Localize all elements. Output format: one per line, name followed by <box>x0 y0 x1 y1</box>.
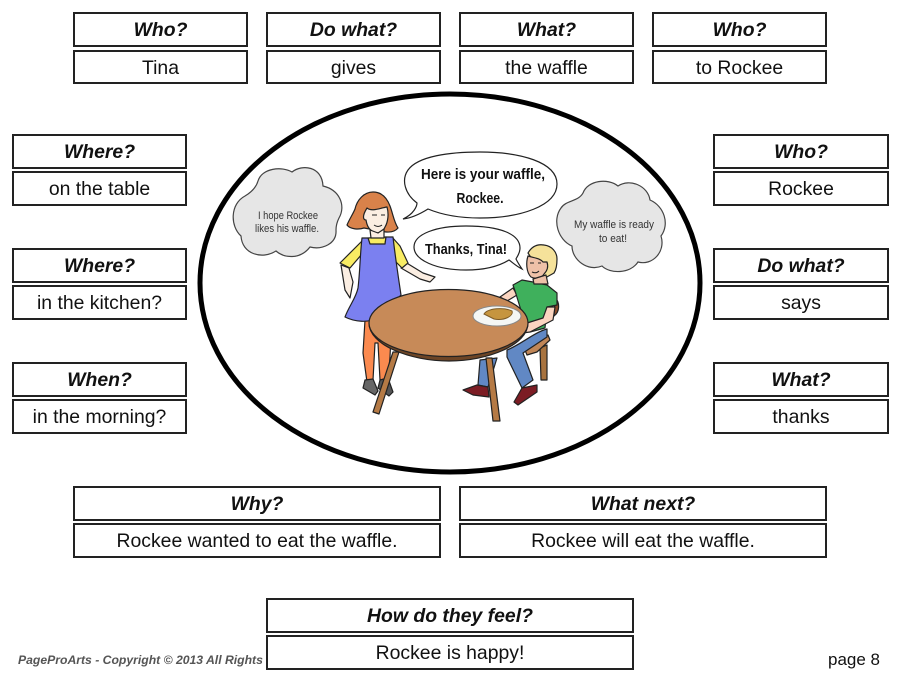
heading: Why?: Why? <box>231 493 283 515</box>
left: When in the morning <box>12 362 187 434</box>
answer: Tina: Tina <box>142 56 179 78</box>
answer: Rockee <box>713 171 889 206</box>
heading: Where? <box>12 134 187 169</box>
row: Who Tina <box>73 12 248 84</box>
answer: in the kitchen? <box>12 285 187 320</box>
heading: Do what?: Do what? <box>757 255 845 277</box>
heading: What? <box>459 12 634 47</box>
heading: What next? <box>459 486 827 521</box>
thought cloud: Rockee: to eat! <box>599 233 627 245</box>
answer: in the kitchen?: in the kitchen? <box>37 292 162 314</box>
heading: Who?: Who? <box>774 141 828 163</box>
bottom: How do they feel <box>266 598 634 670</box>
answer: feeling <box>266 635 634 670</box>
answer: why: Rockee wanted to eat the waffle. <box>116 530 397 552</box>
answer: gives <box>266 50 441 84</box>
oval frame <box>200 94 700 472</box>
left: Where in the kitchen <box>12 248 187 320</box>
heading: Who? <box>73 12 248 47</box>
copyright footer: PageProArts - Copyright © 2013 All Rights <box>18 653 263 667</box>
heading: How do they feel?: How do they feel? <box>367 605 533 627</box>
heading: When?: When? <box>67 369 132 391</box>
answer: why <box>73 523 441 558</box>
row: What the waffle <box>459 12 634 84</box>
plate with waffle <box>473 306 521 326</box>
answer: what next <box>459 523 827 558</box>
table <box>369 290 528 421</box>
speech bubble: Tina: Rockee. <box>456 191 504 207</box>
answer: says <box>713 285 889 320</box>
heading: Who? <box>652 12 827 47</box>
right: Do what says <box>713 248 889 320</box>
heading: Do what?: Do what? <box>310 19 397 41</box>
left: Where on the table <box>12 134 187 206</box>
thought cloud: Rockee: My waffle is ready <box>574 219 654 231</box>
row: Do what gives <box>266 12 441 84</box>
answer: gives: gives <box>331 56 376 78</box>
thought cloud: Tina: likes his waffle. <box>255 223 319 235</box>
answer: on the table: on the table <box>49 178 150 200</box>
heading: Who?: Who? <box>134 19 187 41</box>
answer: says: says <box>781 292 821 314</box>
row: Who to Rockee <box>652 12 827 84</box>
thought cloud: Rockee <box>557 181 665 272</box>
heading: Why? <box>73 486 441 521</box>
heading: Do what? <box>713 248 889 283</box>
heading: Who? <box>713 134 889 169</box>
answer: the waffle: the waffle <box>505 56 588 78</box>
speech bubble: Tina: Here is your waffle, <box>421 167 545 183</box>
speech bubble: Rockee <box>414 226 522 270</box>
heading: What next?: What next? <box>591 493 695 515</box>
thought cloud: Tina <box>233 168 342 257</box>
answer: to Rockee <box>652 50 827 84</box>
answer: thanks <box>713 399 889 434</box>
speech bubble: Tina <box>403 152 557 219</box>
boy Rockee <box>463 245 559 405</box>
heading: Where? <box>12 248 187 283</box>
heading: Who?: Who? <box>713 19 766 41</box>
answer: thanks: thanks <box>772 406 830 428</box>
girl Tina <box>340 192 435 396</box>
bottom: Why <box>73 486 441 558</box>
heading: Do what? <box>266 12 441 47</box>
heading: When? <box>12 362 187 397</box>
right: Who Rockee <box>713 134 889 206</box>
speech bubble: Rockee: Thanks, Tina! <box>425 242 507 258</box>
heading: What?: What? <box>771 369 831 391</box>
bottom: What next <box>459 486 827 558</box>
answer: Rockee: Rockee <box>768 178 834 200</box>
answer: what next: Rockee will eat the waffle. <box>531 530 755 552</box>
answer: in the morning? <box>12 399 187 434</box>
page number: page 8 <box>828 650 880 669</box>
heading: Where?: Where? <box>64 141 135 163</box>
answer: on the table <box>12 171 187 206</box>
answer: in the morning?: in the morning? <box>33 406 166 428</box>
heading: What? <box>713 362 889 397</box>
answer: Tina <box>73 50 248 84</box>
answer: to Rockee: to Rockee <box>696 56 783 78</box>
heading: How do they feel? <box>266 598 634 633</box>
right: What thanks <box>713 362 889 434</box>
answer: the waffle <box>459 50 634 84</box>
answer: feeling: Rockee is happy! <box>376 642 524 664</box>
thought cloud: Tina: I hope Rockee <box>258 210 318 222</box>
heading: Where?: Where? <box>64 255 135 277</box>
heading: What?: What? <box>517 19 576 41</box>
